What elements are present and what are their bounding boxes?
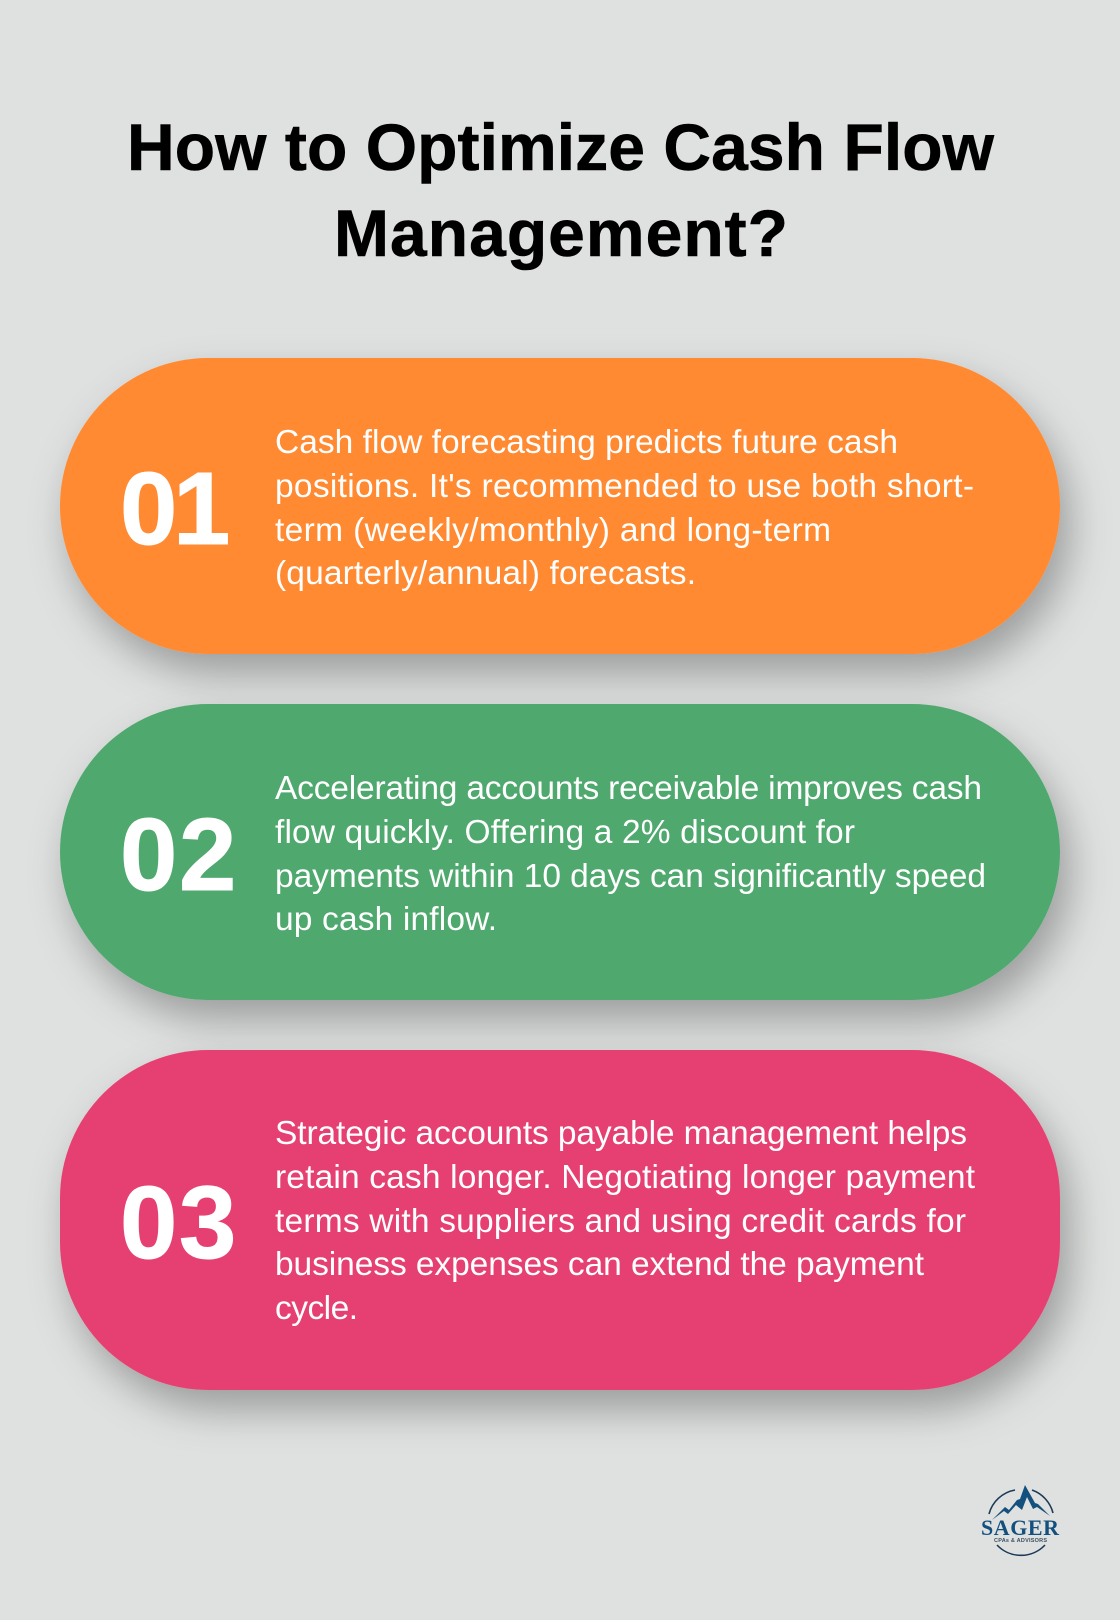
text block 01: positions. It's recommended to use both short- (275, 468, 974, 505)
text block 01: term (weekly/monthly) and long-term (275, 512, 831, 549)
number 02: 02 (120, 797, 236, 912)
text block 02: flow quickly. Offering a 2% discount for (275, 814, 855, 851)
text block 02: Accelerating accounts receivable improves cash (275, 770, 982, 807)
panel: step 03 payable (60, 1050, 1060, 1390)
text block 01 (275, 424, 974, 592)
text block 03: cycle. (275, 1290, 358, 1327)
panel: step 01 forecasting (60, 358, 1060, 654)
number 03: 03 (120, 1165, 236, 1280)
text block 02: payments within 10 days can significantly speed (275, 858, 986, 895)
text block 02 (275, 770, 986, 938)
text block 03: business expenses can extend the payment (275, 1246, 925, 1283)
pill background green (60, 704, 1060, 1000)
text block 03 (275, 1115, 976, 1327)
icon: Sager logo (981, 1485, 1060, 1555)
panel: step 02 receivable (60, 704, 1060, 1000)
text block 03: Strategic accounts payable management helps (275, 1115, 967, 1152)
icon: Sager logo: CPAs & ADVISORS (994, 1538, 1047, 1544)
text block 03: terms with suppliers and using credit cards for (275, 1203, 966, 1240)
text block 01: Cash flow forecasting predicts future cash (275, 424, 898, 461)
text block 02: up cash inflow. (275, 901, 497, 938)
pill background pink (60, 1050, 1060, 1390)
title: How to Optimize Cash Flow (127, 110, 995, 184)
text block 01: (quarterly/annual) forecasts. (275, 555, 696, 592)
title: Management? (334, 196, 788, 270)
pill background orange (60, 358, 1060, 654)
title (127, 110, 995, 270)
text block 03: retain cash longer. Negotiating longer payment (275, 1159, 976, 1196)
number 01: 01 (120, 451, 230, 566)
icon: Sager logo: SAGER (981, 1515, 1060, 1540)
